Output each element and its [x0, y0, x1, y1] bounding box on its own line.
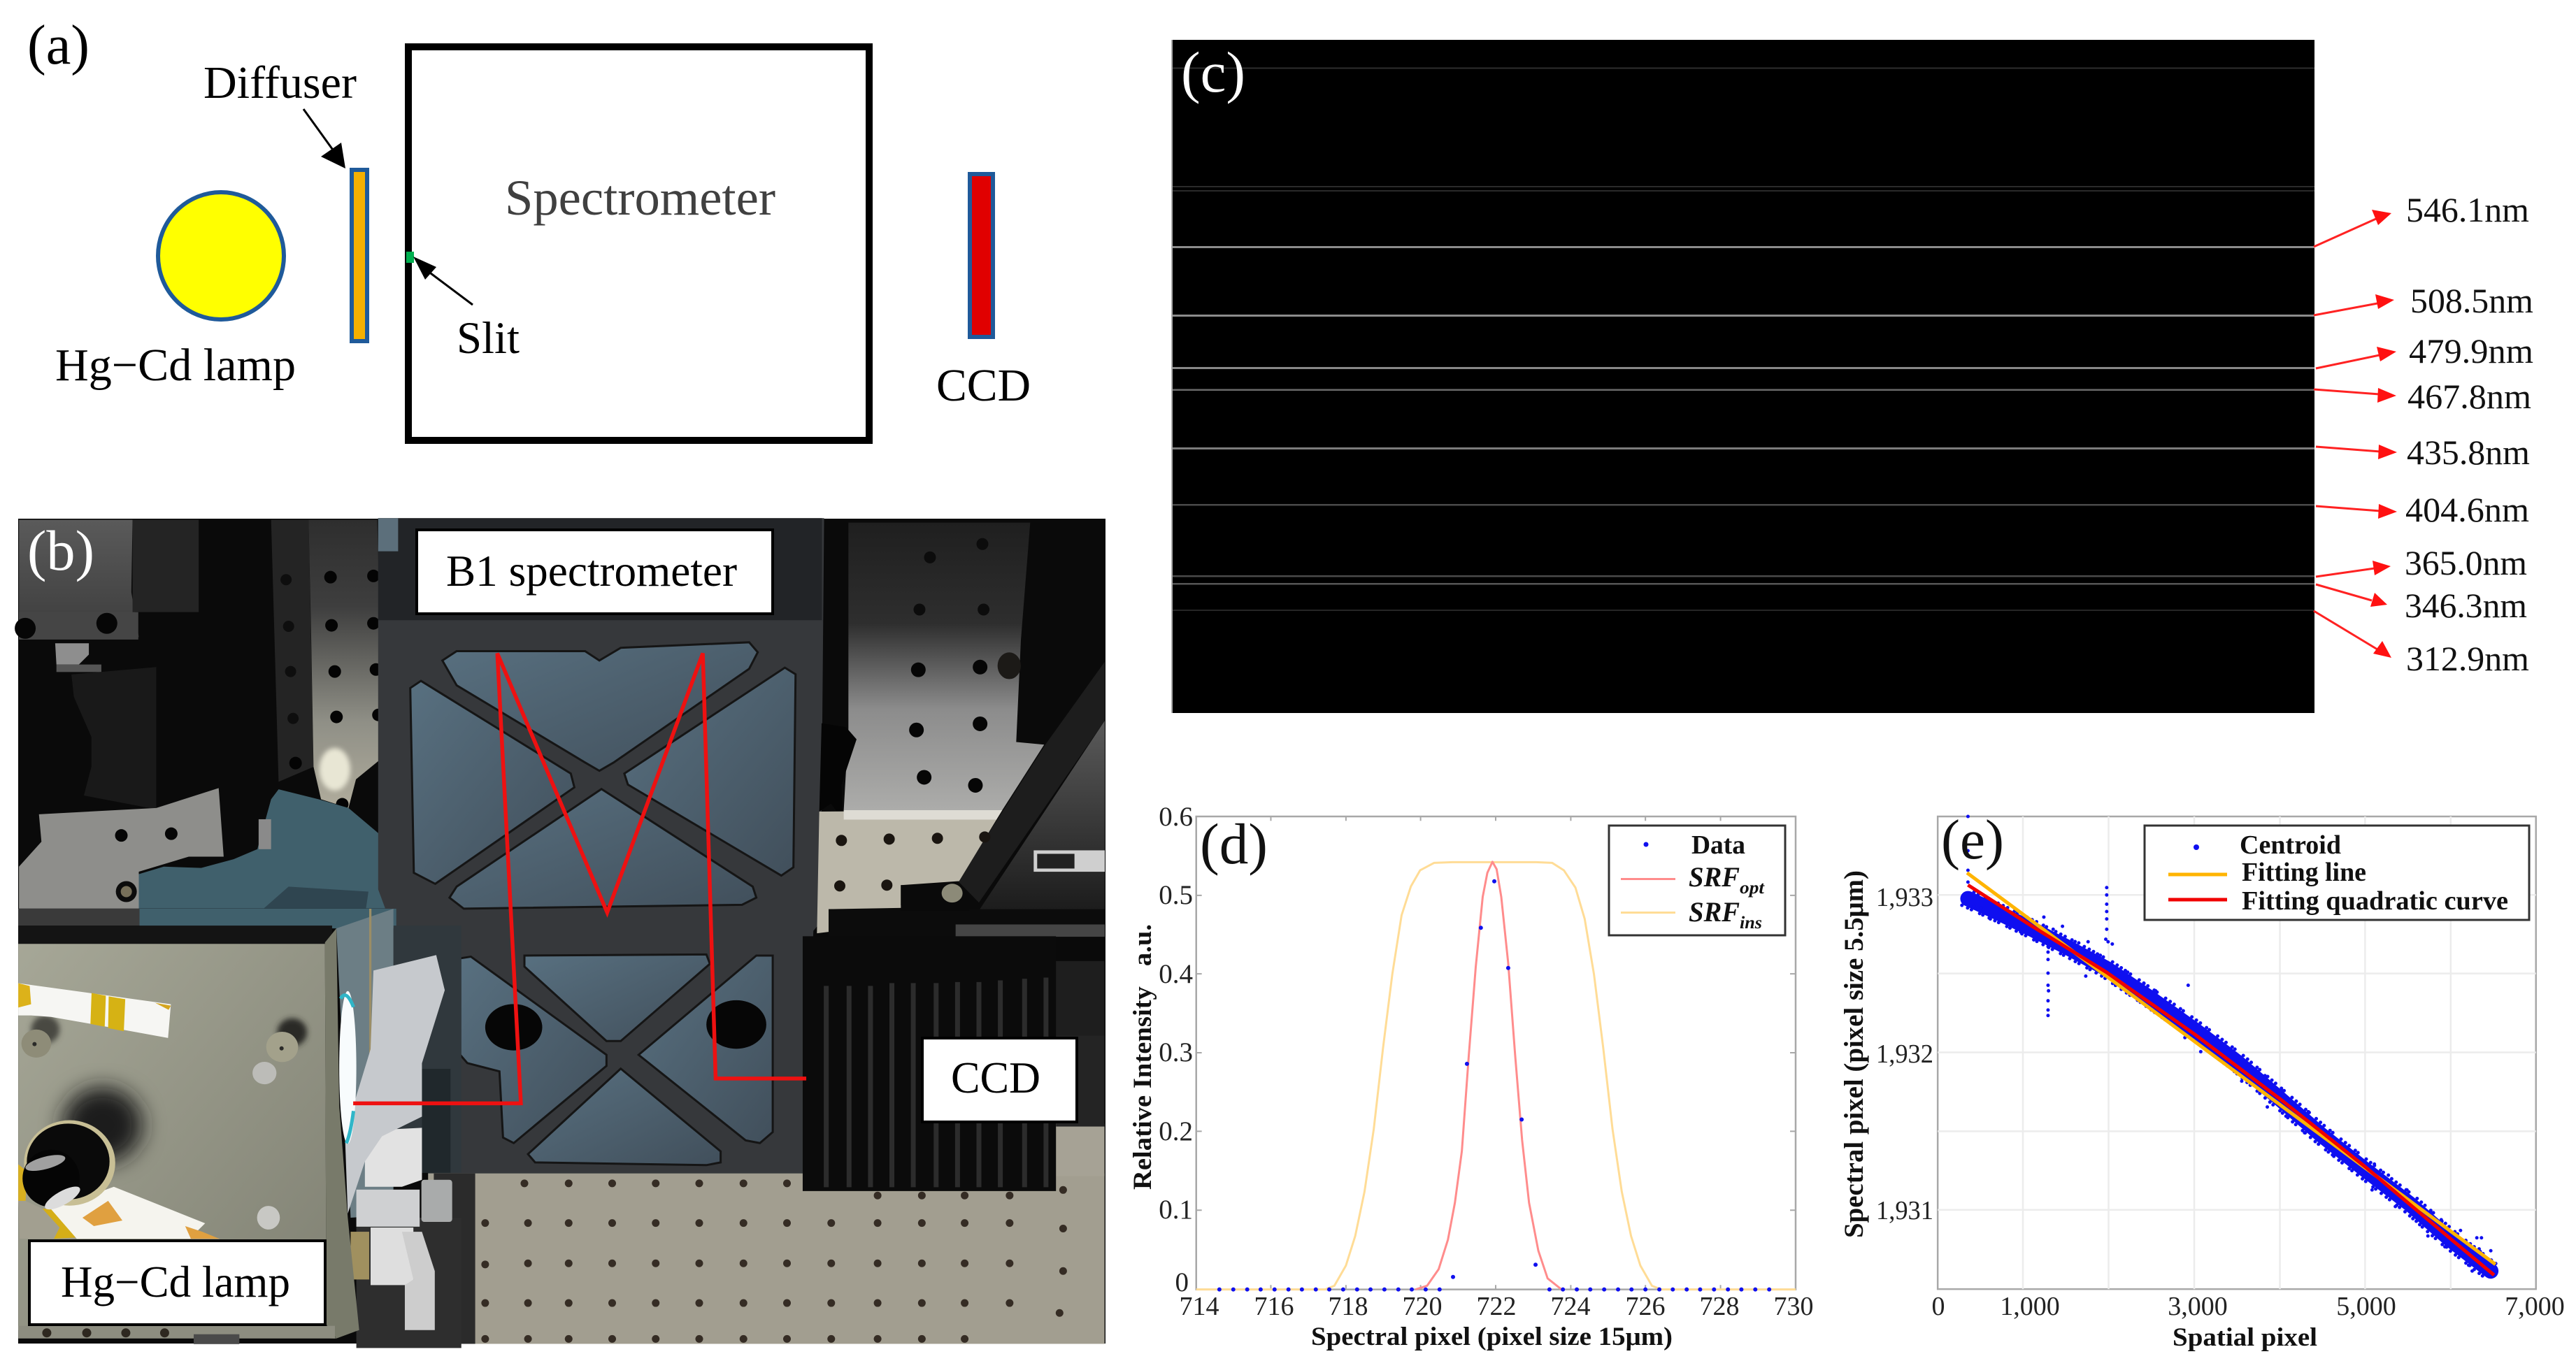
spectrometer label: Spectrometer	[505, 170, 775, 226]
y tick labels: 1,932	[1876, 1039, 1933, 1069]
x tick labels: 1,000	[2000, 1292, 2060, 1321]
y tick labels: 0.2	[1159, 1116, 1193, 1146]
wavelength labels: 467.8nm	[2407, 377, 2531, 416]
label box: CCD	[922, 1038, 1077, 1122]
lamp circle	[158, 192, 284, 319]
x tick labels: 714	[1179, 1292, 1219, 1321]
red light path	[353, 654, 806, 1103]
x tick labels: 0	[1931, 1292, 1945, 1321]
y tick labels: 1,933	[1876, 883, 1933, 912]
lamp label: Hg−Cd lamp	[55, 340, 296, 391]
panel label (a): (a)	[27, 15, 90, 76]
y tick labels: 0.1	[1159, 1195, 1193, 1225]
diffuser plate	[352, 170, 367, 341]
x tick labels: 3,000	[2168, 1292, 2228, 1321]
legend: Fitting line	[2242, 858, 2366, 887]
black detector image	[1172, 40, 2314, 713]
left edge highlight	[1171, 40, 1173, 713]
SRF_opt curve	[1415, 862, 1561, 1290]
wavelength arrows	[2314, 210, 2397, 658]
y tick labels: 0.5	[1159, 880, 1193, 910]
slit label: Slit	[457, 313, 520, 363]
upper right optical table	[817, 523, 1105, 937]
legend: SRF	[1689, 861, 1740, 893]
label box: B1 spectrometer	[417, 530, 773, 614]
legend	[2145, 826, 2529, 920]
wavelength labels: 435.8nm	[2407, 433, 2530, 472]
panel a: schematic	[27, 15, 1031, 440]
panel e: centroid fit chart	[1839, 808, 2565, 1352]
legend	[1609, 826, 1785, 935]
photo background	[18, 519, 1105, 1344]
SRF_ins curve	[1196, 862, 1796, 1290]
x axis title: Spatial pixel	[2173, 1323, 2317, 1352]
wavelength labels: 546.1nm	[2406, 190, 2529, 229]
x tick labels: 722	[1477, 1292, 1516, 1321]
y tick labels	[1876, 883, 1933, 1225]
panel label (d): (d)	[1200, 812, 1268, 876]
y tick labels	[1159, 802, 1193, 1297]
panel label (e): (e)	[1941, 808, 2004, 871]
label box: Hg-Cd lamp: Hg−Cd lamp	[61, 1258, 290, 1306]
x tick labels: 720	[1403, 1292, 1442, 1321]
panel d: spectral response chart	[1129, 802, 1814, 1351]
label box: Hg-Cd lamp	[29, 1241, 325, 1325]
lamp housing and connector	[18, 909, 461, 1348]
x tick labels	[1931, 1292, 2565, 1321]
fitting quadratic curve	[1968, 885, 2494, 1275]
x tick labels: 718	[1329, 1292, 1368, 1321]
breadboard, heat sink and light path	[428, 936, 1105, 1344]
legend: Fitting quadratic curve	[2242, 886, 2508, 916]
wavelength labels: 404.6nm	[2405, 490, 2529, 529]
x tick labels: 716	[1254, 1292, 1294, 1321]
legend: Centroid	[2240, 830, 2341, 860]
y tick labels: 0.3	[1159, 1037, 1193, 1067]
y axis title: Relative Intensity a.u.	[1129, 924, 1157, 1190]
wavelength labels: 508.5nm	[2410, 281, 2533, 320]
plot area	[1938, 816, 2536, 1289]
label box: CCD: CCD	[951, 1053, 1040, 1102]
plot area	[1196, 816, 1796, 1290]
legend: ins	[1740, 914, 1762, 933]
CCD sensor	[970, 174, 993, 337]
label box: B1 spectrometer: B1 spectrometer	[446, 547, 737, 596]
panel label (b): (b)	[27, 519, 94, 582]
panel label (c): (c)	[1181, 40, 1245, 104]
wavelength labels	[2405, 190, 2533, 678]
wavelength labels: 365.0nm	[2405, 543, 2527, 582]
x tick labels: 730	[1773, 1292, 1814, 1321]
wavelength labels: 312.9nm	[2406, 639, 2529, 678]
slit arrow	[413, 257, 473, 305]
legend: opt	[1740, 879, 1765, 898]
panel b: photograph of setup	[18, 518, 1105, 1348]
y axis title: Spectral pixel (pixel size 5.5μm)	[1839, 870, 1869, 1238]
spectral lines	[1173, 67, 2314, 611]
data points	[1219, 881, 1769, 1290]
legend: SRF	[1689, 896, 1740, 928]
centroid scatter band	[1962, 816, 2497, 1278]
y tick labels: 0	[1175, 1267, 1189, 1297]
spectrometer box	[408, 47, 869, 440]
upper left optical table	[19, 520, 391, 909]
slit marker	[406, 252, 414, 263]
x tick labels: 7,000	[2505, 1292, 2565, 1321]
diffuser arrow	[303, 109, 345, 168]
x axis title: Spectral pixel (pixel size 15μm)	[1311, 1323, 1673, 1351]
y tick labels: 1,931	[1876, 1196, 1933, 1225]
CCD label: CCD	[936, 360, 1031, 411]
fitting line	[1967, 873, 2496, 1265]
panel c: spectral line image	[1171, 40, 2533, 713]
legend: Data	[1691, 830, 1745, 860]
x tick labels	[1179, 1292, 1814, 1321]
y tick labels: 0.6	[1159, 802, 1193, 832]
y tick labels: 0.4	[1159, 959, 1193, 989]
x tick labels: 728	[1699, 1292, 1740, 1321]
diffuser label: Diffuser	[203, 57, 357, 108]
wavelength labels: 346.3nm	[2405, 586, 2527, 625]
x tick labels: 726	[1625, 1292, 1666, 1321]
x tick labels: 724	[1551, 1292, 1590, 1321]
spectrometer body	[378, 518, 824, 1174]
x tick labels: 5,000	[2336, 1292, 2396, 1321]
wavelength labels: 479.9nm	[2409, 331, 2533, 370]
